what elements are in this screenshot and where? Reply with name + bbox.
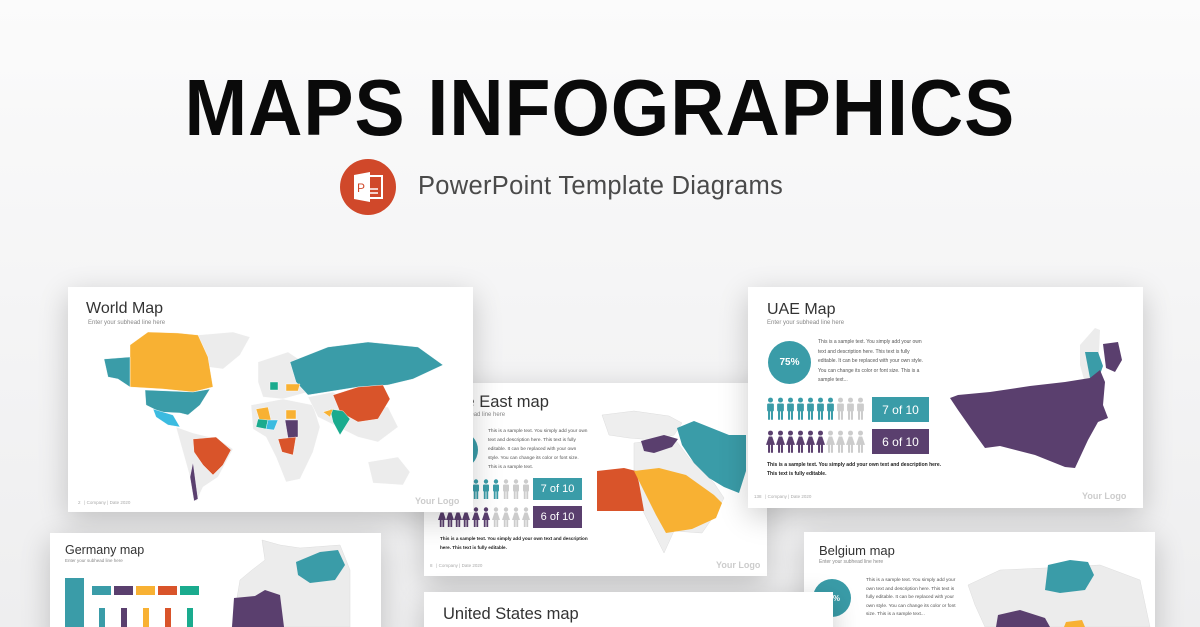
text block: This is a sample text. You simply add your own text and description here. This text is fully editable. It can be replaced with your own style. You can change its color or font size. This is a sample text...: [818, 339, 923, 383]
heading: world map: World Map: [86, 300, 163, 317]
panel: UAE map slide: 138 | Company | Date 2020: [754, 494, 811, 499]
heading: united states: United States map: [443, 605, 579, 623]
panel: germany map slide: Enter your subhead line here: [65, 558, 123, 563]
stat circle 75%: [768, 341, 811, 384]
panel: germany map slide: [50, 533, 381, 627]
panel: UAE map slide: [748, 287, 1143, 508]
box 6 of 10: [533, 506, 582, 528]
pictogram row 1: [473, 479, 529, 499]
map: middle east: [597, 410, 746, 553]
panel: middle east map slide: Enter your subhead line here: [428, 412, 505, 418]
box 6 of 10: 6 of 10: [882, 434, 919, 448]
heading: belgium: Belgium map: [819, 543, 895, 558]
box 7 of 10: 7 of 10: [541, 483, 574, 495]
map: world: [104, 332, 443, 501]
heading: UAE map: UAE Map: [767, 301, 835, 318]
stat circle: [813, 579, 851, 617]
stat circle: [440, 431, 478, 469]
panel: united states map slide: [424, 592, 833, 627]
text block: This is a sample text. You simply add your own text and description here. This text is fully editable. It can be replaced with your own style. You can change its color or font size. This is a sample text.: [488, 429, 587, 470]
panel: world map slide: Your Logo: [415, 496, 459, 506]
panel: UAE map slide: Your Logo: [1082, 491, 1126, 501]
panel: world map slide: [68, 287, 473, 512]
pictogram row 2: [766, 430, 865, 453]
map: belgium: [968, 560, 1150, 627]
bold text: This is a sample text. You simply add your own text and description here. This text is fully editable.: [767, 462, 941, 477]
category boxes: [92, 586, 199, 627]
icon: powerpoint logo: P: [357, 181, 365, 195]
box 6 of 10: [872, 429, 929, 454]
panel: belgium map slide: [804, 532, 1155, 627]
box 7 of 10: 7 of 10: [882, 402, 919, 416]
box 7 of 10: [872, 397, 929, 422]
stat circle: 75%: [824, 594, 840, 602]
panel: world map slide: 2 | Company | Date 2020: [78, 500, 130, 505]
box 6 of 10: 6 of 10: [541, 511, 574, 523]
panel: belgium map slide: Enter your subhead line here: [819, 559, 883, 565]
panel: middle east map slide: 8 | Company | Date 2020: [430, 563, 482, 568]
subtitle: PowerPoint Template Diagrams: [418, 172, 783, 200]
panel: middle east map slide: [424, 383, 767, 576]
heading: germany: Germany map: [65, 543, 144, 557]
title: MAPS INFOGRAPHICS: [185, 63, 1015, 152]
vertical bar: [65, 578, 84, 627]
map: UAE: [950, 328, 1122, 468]
icon: powerpoint logo: [340, 159, 396, 215]
heading: middle east: Middle East map: [426, 393, 549, 411]
panel: world map slide: Enter your subhead line here: [88, 320, 165, 326]
bold text: This is a sample text. You simply add your own text and description here. This text is fully editable.: [440, 536, 588, 550]
panel: UAE map slide: Enter your subhead line here: [767, 320, 844, 326]
stat circle 75%: 75%: [779, 357, 800, 368]
pictogram row 2: [438, 507, 530, 527]
map: germany: [232, 540, 350, 627]
box 7 of 10: [533, 478, 582, 500]
text block: This is a sample text. You simply add your own text and description here. This text is fully editable. It can be replaced with your own style. You can change its color or font size. This is a sample text...: [866, 578, 956, 617]
pictogram row 1: [767, 398, 864, 420]
panel: middle east map slide: Your Logo: [716, 560, 760, 570]
